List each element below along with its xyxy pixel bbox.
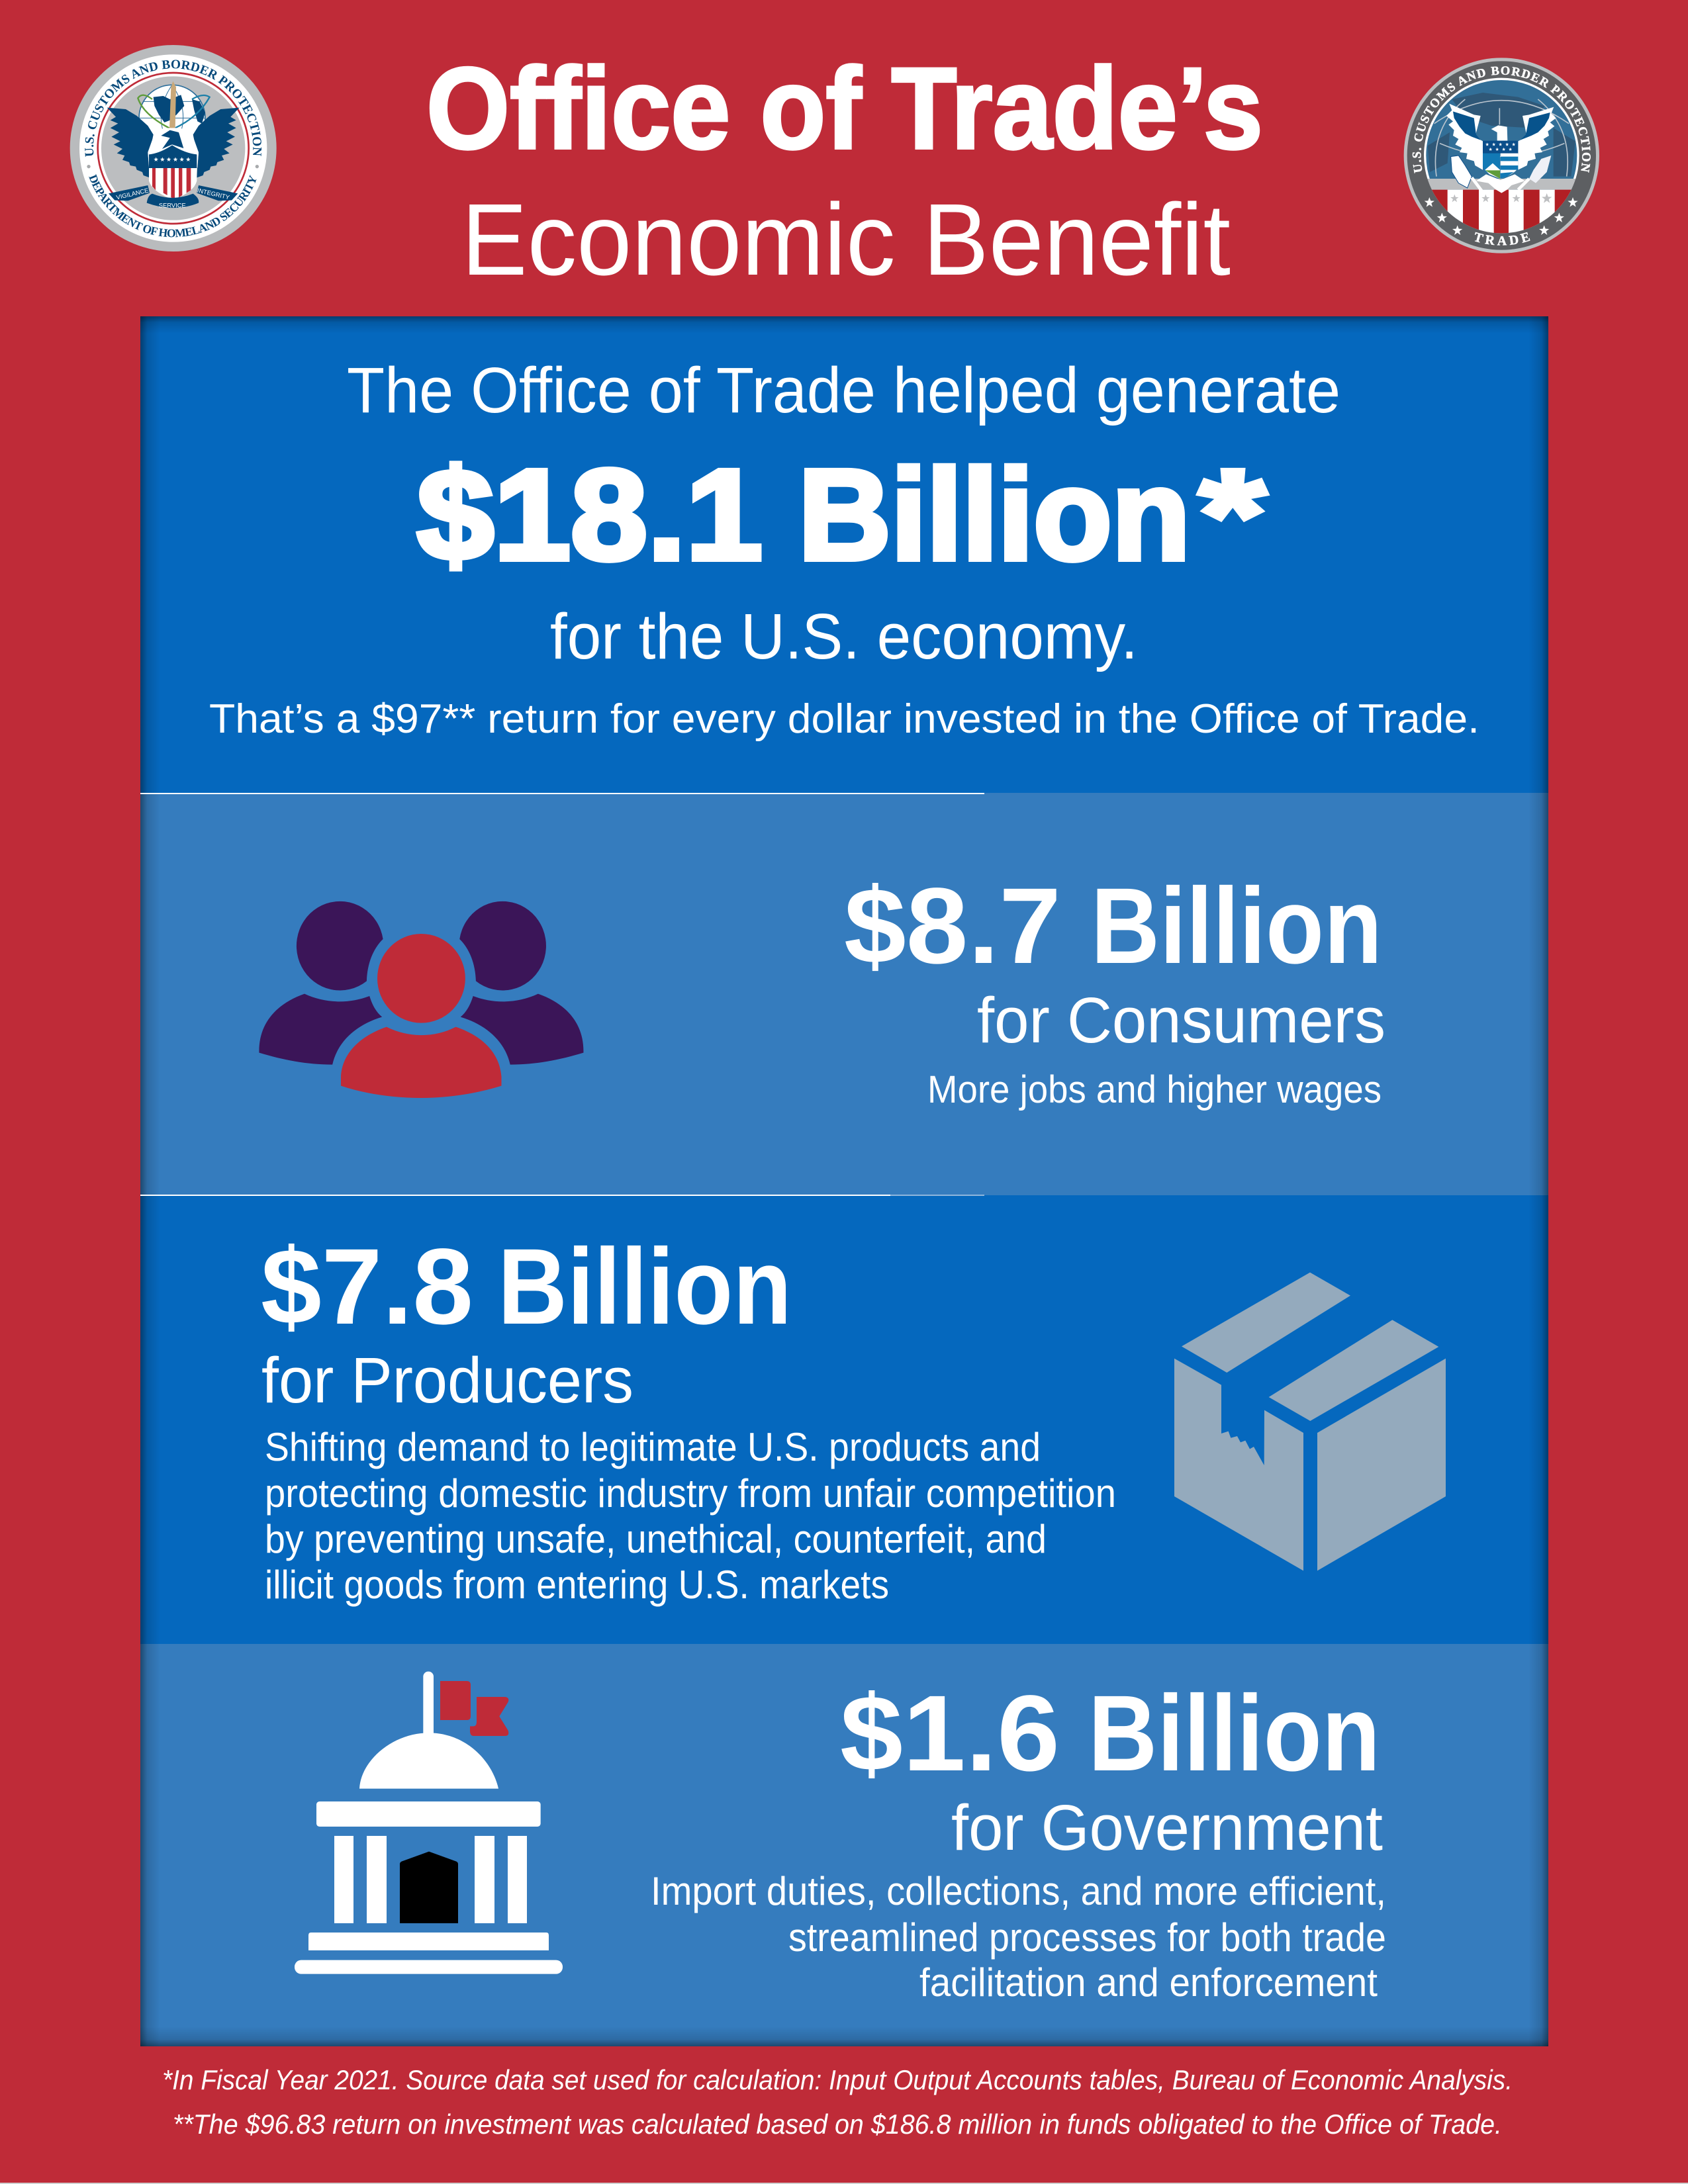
- consumers amount: $8.7: [844, 865, 1061, 986]
- consumers label: for Consumers: [977, 984, 1385, 1056]
- icon: open box: [1174, 1273, 1446, 1570]
- headline figure: [417, 443, 1266, 587]
- consumers description: More jobs and higher wages: [927, 1068, 1382, 1111]
- government description: [651, 1869, 1386, 2005]
- panel: producers: [140, 1195, 1548, 1644]
- logo: CBP Department of Homeland Security seal: VIGILANCE: [116, 187, 149, 201]
- logo: CBP Department of Homeland Security seal: SERVICE: [159, 202, 186, 208]
- producers description: Shifting demand to legitimate U.S. products and: [265, 1425, 1041, 1469]
- producers description: protecting domestic industry from unfair competition: [265, 1471, 1116, 1516]
- panel: consumers: [140, 793, 1548, 1196]
- title: Economic Benefit: [461, 183, 1231, 296]
- economy line: for the U.S. economy.: [550, 600, 1138, 672]
- icon: people: [259, 901, 583, 1098]
- intro line: The Office of Trade helped generate: [347, 354, 1340, 426]
- title: Office of Trade’s: [426, 44, 1263, 173]
- government description: streamlined processes for both trade: [788, 1915, 1386, 1960]
- panel: total economic benefit: [140, 316, 1548, 794]
- producers amount: $7.8: [261, 1226, 473, 1347]
- title: [426, 44, 1263, 296]
- producers description: by preventing unsafe, unethical, counterfeit, and: [265, 1517, 1047, 1561]
- producers amount: [261, 1226, 792, 1347]
- producers description: [265, 1425, 1116, 1607]
- footnotes: [162, 2064, 1513, 2140]
- logo: CBP Department of Homeland Security seal: DEPARTMENT OF HOMELAND SECURITY: [89, 173, 257, 237]
- headline figure: *: [1199, 443, 1266, 587]
- headline figure: $18.1: [417, 443, 763, 587]
- footnotes: **The $96.83 return on investment was calculated based on $186.8 million in funds obligated to the Office of Trade.: [173, 2109, 1502, 2140]
- government amount: Billion: [1088, 1672, 1380, 1794]
- producers description: illicit goods from entering U.S. markets: [265, 1563, 889, 1607]
- logo: CBP Department of Homeland Security seal: INTEGRITY: [197, 187, 230, 201]
- icon: government building: [295, 1672, 563, 1974]
- government description: facilitation and enforcement: [919, 1960, 1378, 2005]
- logo: CBP Department of Homeland Security seal: U.S. CUSTOMS AND BORDER PROTECTION: [85, 60, 262, 157]
- panel: government: [140, 1644, 1548, 2046]
- producers label: for Producers: [261, 1344, 633, 1416]
- headline figure: Billion: [798, 443, 1190, 587]
- consumers amount: [844, 865, 1382, 986]
- government amount: $1.6: [840, 1672, 1060, 1794]
- logo: CBP Trade seal: [1403, 58, 1599, 253]
- government label: for Government: [951, 1792, 1383, 1864]
- footnotes: *In Fiscal Year 2021. Source data set used for calculation: Input Output Accounts tables, Bureau of Economic Analysis.: [162, 2064, 1513, 2095]
- consumers amount: Billion: [1091, 865, 1382, 986]
- producers amount: Billion: [498, 1226, 792, 1347]
- logo: CBP Department of Homeland Security seal: [70, 45, 277, 251]
- logo: CBP Trade seal: TRADE: [1475, 232, 1530, 246]
- government description: Import duties, collections, and more efficient,: [651, 1869, 1386, 1913]
- government amount: [840, 1672, 1380, 1794]
- logo: CBP Trade seal: U.S. CUSTOMS AND BORDER PROTECTION: [1413, 66, 1591, 173]
- return on investment line: That’s a $97** return for every dollar invested in the Office of Trade.: [209, 696, 1479, 742]
